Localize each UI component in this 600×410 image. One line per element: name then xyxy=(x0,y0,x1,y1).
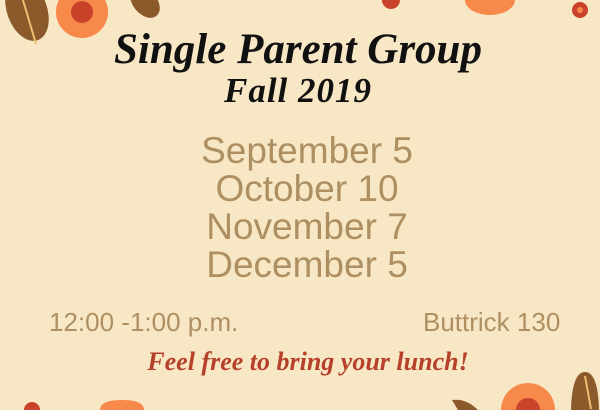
icon: leaf top xyxy=(124,0,166,24)
dates xyxy=(201,130,413,285)
dates: December 5 xyxy=(206,244,408,285)
icon: leaf top left xyxy=(0,0,57,47)
location: Buttrick 130 xyxy=(423,307,560,337)
dates: November 7 xyxy=(206,206,408,247)
dates: October 10 xyxy=(215,168,399,209)
icon: flower bottom right xyxy=(501,383,555,410)
icon: small flower top xyxy=(382,0,400,9)
icon: small flower right xyxy=(572,2,588,18)
time: 12:00 -1:00 p.m. xyxy=(49,307,238,337)
subtitle: Fall 2019 xyxy=(224,71,372,110)
icon: flower bottom left xyxy=(100,400,144,410)
icon: leaf bottom right xyxy=(571,372,599,410)
dates: September 5 xyxy=(201,130,413,171)
icon: flower top left xyxy=(56,0,108,38)
title: Single Parent Group xyxy=(114,26,482,73)
icon: flower top right xyxy=(465,0,515,15)
icon: leaf bottom xyxy=(452,400,478,410)
note: Feel free to bring your lunch! xyxy=(147,347,469,376)
icon: small flower bottom left xyxy=(24,402,40,410)
